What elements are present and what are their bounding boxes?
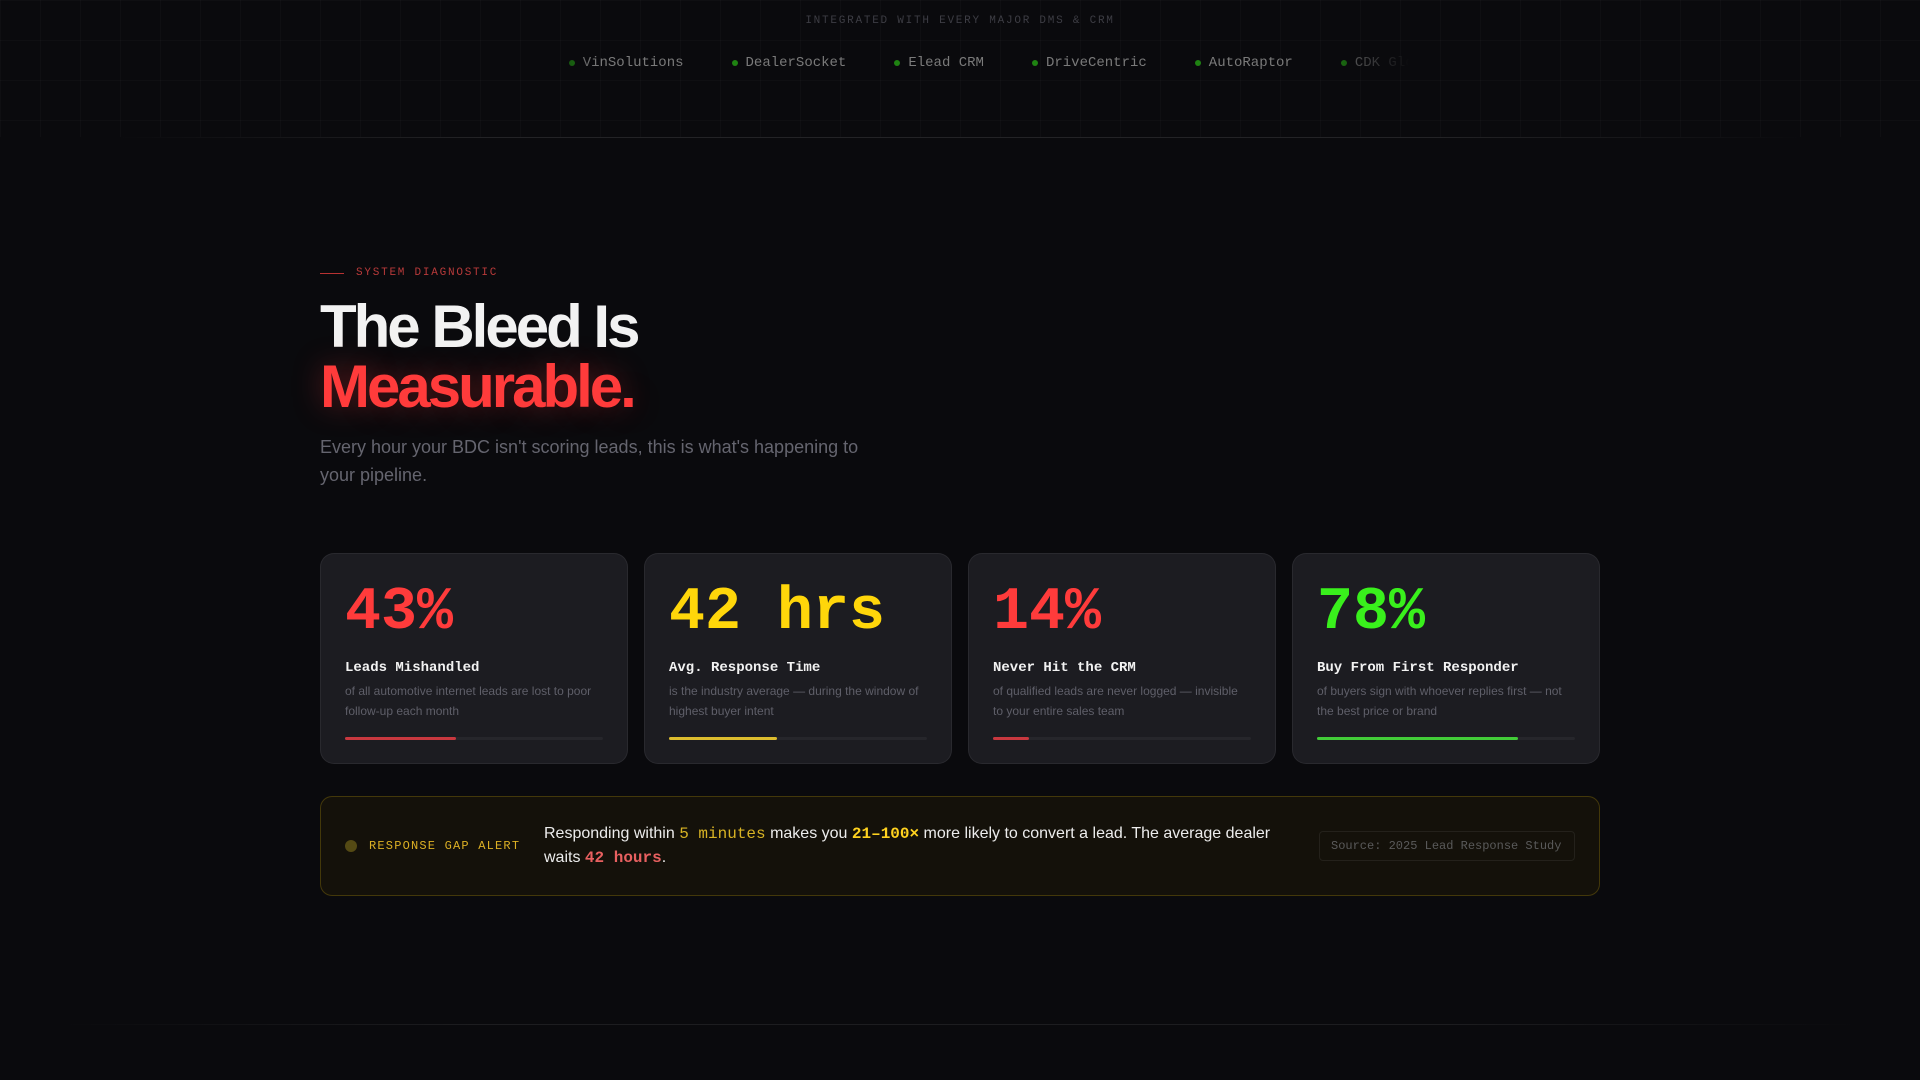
title: Measurable. xyxy=(320,353,634,420)
title xyxy=(310,293,638,420)
stat card: buy from first responder xyxy=(1292,553,1600,764)
alert message xyxy=(544,825,1270,867)
alert label: RESPONSE GAP ALERT xyxy=(369,839,520,853)
alert panel: response gap xyxy=(320,796,1600,896)
progress bar 14% xyxy=(993,737,1251,740)
stat value: 14% xyxy=(993,579,1101,647)
stat description xyxy=(345,684,591,718)
stat description: is the industry average — during the window of xyxy=(669,684,918,698)
stat label: Buy From First Responder xyxy=(1317,660,1519,676)
item: DriveCentric xyxy=(1032,56,1146,66)
stat value: 43% xyxy=(345,579,453,647)
integrations logo strip xyxy=(569,56,1403,69)
stat value: 78% xyxy=(1317,579,1425,647)
stat description xyxy=(669,684,918,718)
alert message: Responding within 5 minutes makes you 21–100× more likely to convert a lead. The average dealer xyxy=(544,825,1270,843)
stat description: follow-up each month xyxy=(345,704,459,718)
item: AutoRaptor: AutoRaptor xyxy=(1209,55,1293,71)
item: Elead CRM xyxy=(894,56,983,66)
stat description: of buyers sign with whoever replies first — not xyxy=(1317,684,1562,698)
subtitle xyxy=(320,437,858,485)
stat description: the best price or brand xyxy=(1317,704,1437,718)
item: DealerSocket: DealerSocket xyxy=(746,55,846,71)
progress bar 78% xyxy=(1317,737,1575,740)
alert pulse dot xyxy=(345,840,357,852)
integrations heading: INTEGRATED WITH EVERY MAJOR DMS & CRM xyxy=(805,15,1115,27)
title: The Bleed Is xyxy=(320,293,637,360)
stat description xyxy=(1317,684,1562,718)
progress bar 43% xyxy=(345,737,603,740)
stat description: of all automotive internet leads are lost to poor xyxy=(345,684,591,698)
stat value: 42 hrs xyxy=(669,579,885,647)
source tag xyxy=(1319,831,1575,861)
source tag: Source: 2025 Lead Response Study xyxy=(1331,839,1561,853)
stat description: to your entire sales team xyxy=(993,704,1124,718)
item: CDK Global xyxy=(1341,56,1403,66)
stat description xyxy=(993,684,1238,718)
item: Elead CRM: Elead CRM xyxy=(908,55,984,71)
stat card: average response time xyxy=(644,553,952,764)
item: VinSolutions xyxy=(569,56,682,66)
subtitle: Every hour your BDC isn't scoring leads, this is what's happening to xyxy=(320,437,858,457)
stat description: highest buyer intent xyxy=(669,704,774,718)
stat description: of qualified leads are never logged — invisible xyxy=(993,684,1238,698)
eyebrow: system diagnostic: SYSTEM DIAGNOSTIC xyxy=(356,267,498,279)
alert message: waits 42 hours. xyxy=(544,849,666,867)
stat label: Avg. Response Time xyxy=(669,660,820,676)
item: VinSolutions: VinSolutions xyxy=(583,55,684,71)
progress bar 42% xyxy=(669,737,927,740)
stat label: Never Hit the CRM xyxy=(993,660,1136,676)
item: DriveCentric: DriveCentric xyxy=(1046,55,1147,71)
stat card: leads mishandled xyxy=(320,553,628,764)
item: AutoRaptor xyxy=(1195,57,1292,69)
stat label: Leads Mishandled xyxy=(345,660,479,676)
item: DealerSocket xyxy=(732,56,845,66)
subtitle: your pipeline. xyxy=(320,465,427,485)
top integrations band grid xyxy=(0,0,1920,137)
stat card: never hit the CRM xyxy=(968,553,1276,764)
